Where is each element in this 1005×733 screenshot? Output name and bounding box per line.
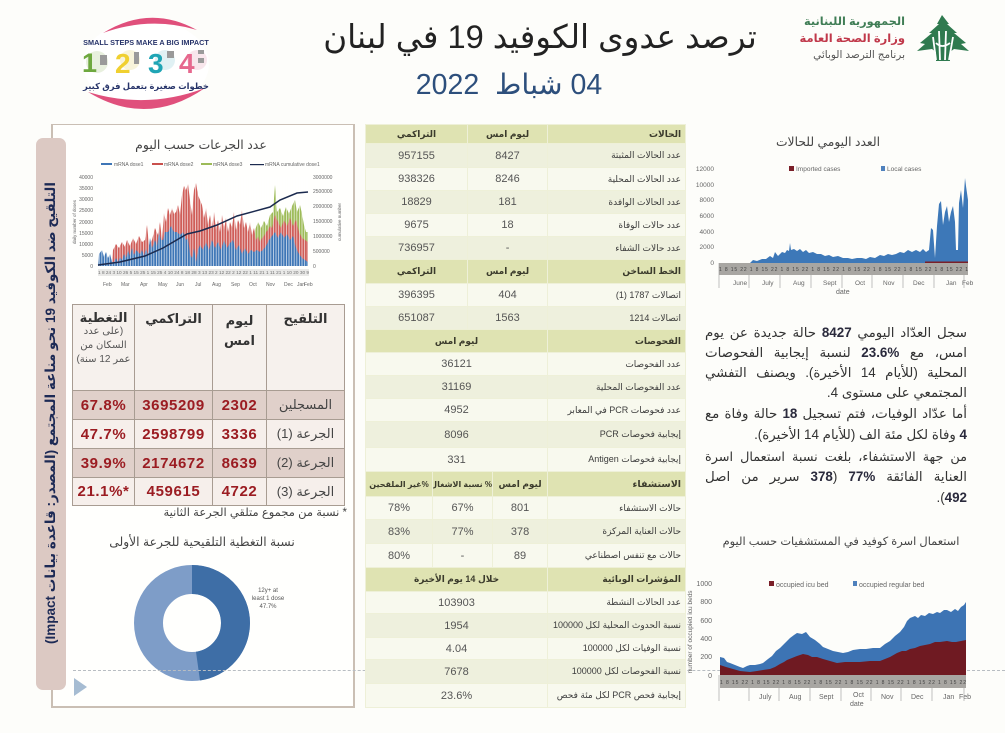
axes labels: 2000000	[313, 204, 333, 210]
table: vaccination: الجرعة (1)	[277, 426, 334, 441]
section: hospitalisation: 83%	[388, 526, 410, 538]
stacked bars	[98, 177, 309, 266]
narrative text block: 4 وفاة لكل مئة الف (للأيام 14 الأخيرة).	[754, 427, 967, 442]
section: cases: 957155	[398, 150, 435, 162]
chart: hospital bed occupancy: 1000	[696, 581, 712, 588]
axes labels: 500000	[313, 249, 330, 255]
table: vaccination: 8639	[222, 454, 257, 472]
chart: daily cases: 4000	[700, 229, 714, 236]
chart: hospital bed occupancy: date	[850, 701, 864, 708]
table: vaccination: 459615	[147, 483, 200, 500]
table: vaccination: 2174672	[142, 454, 205, 472]
section: hospitalisation: 77%	[451, 526, 474, 538]
section: epidemiological indicators: 1954	[444, 620, 469, 632]
section: tests: عدد الفحوصات	[625, 358, 681, 368]
section: cases: -	[506, 242, 509, 254]
axes labels: daily number of doses	[72, 199, 77, 244]
section: cases: عدد حالات الشفاء	[615, 242, 681, 252]
chart: daily cases: June	[733, 280, 747, 287]
table: vaccination: 21.1%*	[78, 483, 129, 500]
section: tests: عدد فحوصات PCR في المعابر	[567, 404, 681, 414]
chart: hospital bed occupancy: 0	[708, 673, 712, 680]
panel: vaccination frame	[51, 124, 355, 708]
legend: mRNA dose2	[164, 162, 194, 168]
table: vaccination: ليوم امس	[224, 313, 255, 348]
section: cases: 938326	[398, 173, 435, 185]
heading: daily doses: عدد الجرعات حسب اليوم	[135, 138, 267, 152]
chart: daily cases: July	[762, 280, 774, 287]
axes labels: 1 8 24 3 10 26 5 15 25 1 15 25 4 10 24 8 18 28 3 13 23 2 12 22 2 12 22 1 11 21 1 11 21 1 10 20 30 9	[98, 270, 309, 275]
axes labels: Jul	[195, 282, 201, 288]
ministry logo text	[799, 16, 905, 61]
section: cases: 18	[501, 219, 514, 231]
date: 04 شباط 2022	[416, 69, 602, 101]
chart: daily cases: Aug	[793, 280, 805, 287]
chart: daily cases: date	[836, 289, 850, 296]
section: hotline: الخط الساخن	[622, 266, 681, 276]
table: vaccination: التلقيح	[284, 311, 327, 326]
section: cases: ليوم امس	[486, 128, 529, 138]
legend: Local cases	[887, 166, 922, 173]
section: cases: 8246	[495, 173, 520, 185]
section: tests: الفحوصات	[635, 336, 681, 346]
axes labels: 1000000	[313, 234, 333, 240]
logo: small steps make a big impact: 4	[179, 48, 195, 79]
section: cases: 18829	[401, 196, 432, 208]
axes labels: 1500000	[313, 219, 333, 225]
section: hospitalisation: 67%	[451, 502, 474, 514]
dashed separator line	[73, 670, 1005, 671]
axes labels: 10000	[79, 242, 93, 248]
section: tests: 4952	[444, 404, 469, 416]
axes labels: Feb	[103, 282, 112, 288]
icon: cedar tree with hand	[917, 15, 969, 61]
chart: hospital bed occupancy: Dec	[911, 694, 924, 701]
legend: occupied regular bed	[859, 582, 924, 589]
legend: mRNA dose1	[114, 162, 144, 168]
narrative text block: سجل العدّاد اليومي 8427 حالة جديدة عن يوم	[705, 325, 967, 340]
donut label	[252, 588, 284, 610]
section: hospitalisation: حالات مع تنفس اصطناعي	[585, 550, 681, 560]
ministry logo text: وزارة الصحة العامة	[799, 32, 905, 44]
donut label: 12y+ at	[258, 588, 278, 594]
section: tests	[366, 330, 685, 471]
section: cases: الحالات	[649, 128, 681, 138]
table: indicators	[365, 124, 686, 708]
section: epidemiological indicators: إيجابية فحص PCR لكل مئة فحص	[557, 690, 681, 700]
chart: hospital bed occupancy: Jan	[943, 694, 954, 701]
axes labels: Oct	[249, 282, 257, 288]
chart: daily cases: Sept	[823, 280, 837, 287]
chart: hospital bed occupancy: Oct	[853, 692, 864, 699]
footnote: * نسبة من مجموع متلقي الجرعة الثانية	[163, 507, 347, 519]
chart: daily cases: 0	[710, 260, 714, 267]
section: cases: عدد الحالات المثبتة	[611, 150, 681, 160]
axes labels: 3000000	[313, 175, 333, 181]
section: tests: ليوم امس	[435, 336, 478, 346]
ministry logo text: الجمهورية اللبنانية	[804, 16, 905, 28]
axes labels: Nov	[266, 282, 275, 288]
section: epidemiological indicators: 4.04	[446, 642, 467, 654]
narrative text block: أما عدّاد الوفيات، فتم تسجيل 18 حالة وفاة مع	[705, 406, 967, 421]
section: hospitalisation: 801	[511, 502, 529, 514]
chart: daily cases: Feb	[962, 280, 974, 287]
legend: occupied icu bed	[776, 582, 829, 589]
heading: coverage donut: نسبة التغطية التلقيحية للجرعة الأولى	[109, 535, 295, 549]
axes labels: Sep	[231, 282, 240, 288]
axes labels: 40000	[79, 175, 93, 181]
axes labels: Aug	[212, 282, 221, 288]
axes labels: Feb	[304, 282, 313, 288]
table: vaccination: الجرعة (2)	[277, 455, 334, 470]
table: vaccination: التغطية	[80, 310, 127, 325]
section: hotline: 404	[498, 289, 517, 301]
chart: daily cases: Oct	[855, 280, 865, 287]
section: hospitalisation: 378	[511, 526, 529, 538]
section: epidemiological indicators: نسبة الوفيات لكل 100000	[583, 643, 681, 653]
section: tests: 8096	[444, 428, 469, 440]
chart: first dose coverage donut	[134, 565, 250, 681]
section: hospitalisation: %غير الملقحين	[369, 480, 429, 488]
section: tests: عدد الفحوصات المحلية	[596, 382, 681, 392]
section: cases: 736957	[398, 242, 435, 254]
axes labels: 20000	[79, 220, 93, 226]
axes labels: Apr	[140, 282, 148, 288]
section: epidemiological indicators: نسبة الحدوث المحلية لكل 100000	[553, 620, 681, 630]
section: cases: 9675	[404, 219, 429, 231]
ICU beds area	[720, 640, 966, 675]
axes labels: 35000	[79, 186, 93, 192]
section: tests: 36121	[441, 358, 472, 370]
donut label: least 1 dose	[252, 596, 284, 602]
legend	[789, 166, 922, 173]
chart: hospital bed occupancy: Aug	[789, 694, 802, 701]
axes labels: Jun	[176, 282, 184, 288]
chart: daily cases: Nov	[883, 280, 895, 287]
axes labels: Mar	[121, 282, 130, 288]
chart: hospital bed occupancy: Feb	[959, 694, 971, 701]
local cases area	[719, 178, 968, 263]
panel: vaccination vertical tab	[36, 138, 66, 690]
narrative text block: امس، مع %23.6 لنسبة إيجابية الفحوصات	[705, 345, 967, 360]
chart: daily cases: Jan	[946, 280, 957, 287]
ministry logo text: برنامج الترصد الوبائي	[813, 49, 905, 61]
chart: daily cases: 8000	[700, 197, 714, 204]
table: vaccination: 47.7%	[81, 426, 126, 442]
axes labels: Dec	[284, 282, 293, 288]
section: hospitalisation: 89	[514, 550, 526, 562]
table: vaccination: 3695209	[142, 396, 205, 414]
section: cases: عدد الحالات المحلية	[608, 174, 681, 184]
heading: hospital beds: استعمال اسرة كوفيد في المستشفيات حسب اليوم	[723, 536, 959, 548]
logo: small steps make a big impact	[82, 18, 209, 109]
section: cases: 8427	[495, 150, 520, 162]
axes labels: 30000	[79, 197, 93, 203]
grey date band	[720, 675, 966, 688]
chart: daily cases: 12000	[696, 166, 714, 173]
chart: daily cases: Dec	[913, 280, 925, 287]
chart: hospital bed occupancy: 600	[700, 618, 712, 625]
chart: daily vaccine doses	[72, 162, 342, 288]
narrative text block	[705, 325, 967, 505]
narrative text block: العناية الفائقة %77 (378 سرير من اصل	[705, 469, 967, 484]
section: hospitalisation: ليوم امس	[498, 478, 542, 488]
section: cases: عدد الحالات الوافدة	[608, 196, 681, 206]
section: hotline: اتصالات 1787 (1)	[616, 290, 681, 300]
chart: daily cases	[696, 166, 974, 296]
section: cases: عدد حالات الوفاة	[618, 220, 681, 230]
section: hotline: التراكمي	[397, 266, 436, 276]
section: epidemiological indicators: نسبة الفحوصات لكل 100000	[572, 666, 681, 676]
axes labels: 0	[313, 264, 316, 270]
chart: hospital bed occupancy: 1 8 15 22 1 8 15 22 1 8 15 22 1 8 15 22 1 8 15 22 1 8 15 22 1 8 15 22 1 8 15 22	[720, 680, 966, 686]
section: epidemiological indicators: المؤشرات الوبائية	[602, 574, 681, 584]
narrative text block: من جهة الاستشفاء، بلغت نسبة استعمال اسرة	[705, 449, 967, 464]
axes labels: cumulative number	[337, 202, 342, 241]
table: vaccination: (على عدد السكان من عمر 12 سنة)	[76, 326, 131, 365]
chart: hospital bed occupancy: number of occupied icu beds	[687, 590, 694, 674]
regular beds area	[720, 602, 966, 675]
chart: hospital bed occupancy	[687, 581, 971, 708]
donut label: 47.7%	[259, 604, 276, 610]
section: hotline: 651087	[398, 312, 435, 324]
table: vaccination: الجرعة (3)	[277, 484, 334, 498]
axes labels: 5000	[82, 253, 93, 259]
cumulative line	[98, 192, 308, 265]
axes labels: May	[158, 282, 168, 288]
section: hotline	[366, 260, 685, 329]
legend	[769, 581, 924, 589]
chart: daily cases: 2000	[700, 244, 714, 251]
section: tests: إيجابية فحوصات Antigen	[588, 454, 681, 464]
section: epidemiological indicators: 7678	[444, 666, 469, 678]
table: vaccination: 3336	[222, 426, 257, 442]
axes labels: 15000	[79, 231, 93, 237]
chart: hospital bed occupancy: Sept	[819, 694, 833, 701]
table: vaccination: المسجلين	[279, 397, 332, 412]
chart: hospital bed occupancy: July	[759, 694, 772, 701]
logo: small steps make a big impact: 3	[148, 48, 164, 79]
section: hotline: 396395	[398, 289, 435, 301]
section: hospitalisation: 78%	[388, 502, 410, 514]
title: ترصد عدوى الكوفيد 19 في لبنان	[323, 18, 757, 55]
section: hotline: اتصالات 1214	[629, 312, 681, 322]
legend: Imported cases	[796, 166, 841, 173]
chart: hospital bed occupancy: Nov	[881, 694, 894, 701]
heading: daily cases: العدد اليومي للحالات	[776, 135, 880, 149]
table: vaccination: 2302	[222, 396, 257, 414]
section: epidemiological indicators: 23.6%	[441, 690, 472, 702]
section: hospitalisation: الاستشفاء	[633, 478, 681, 490]
table: vaccination	[72, 304, 345, 506]
section: cases: 181	[498, 196, 517, 208]
table: vaccination: 2598799	[142, 426, 205, 442]
grey date band	[719, 263, 968, 275]
table: vaccination: 4722	[222, 483, 257, 500]
table: vaccination: 39.9%	[81, 454, 126, 472]
section: tests: إيجابية فحوصات PCR	[600, 429, 681, 439]
axes labels: 25000	[79, 208, 93, 214]
axes labels: 0	[90, 264, 93, 270]
section: hotline: ليوم امس	[486, 266, 529, 276]
logo: small steps make a big impact: 2	[115, 48, 131, 79]
section: hospitalisation	[366, 472, 685, 567]
logo: small steps make a big impact: SMALL STEPS MAKE A BIG IMPACT	[83, 38, 209, 47]
chart: hospital bed occupancy: 200	[700, 654, 712, 661]
chart: daily cases: 10000	[696, 182, 714, 189]
section: hotline: 1563	[495, 312, 520, 324]
table: vaccination: التراكمي	[145, 311, 202, 326]
legend: mRNA cumulative dose1	[265, 162, 320, 168]
vertical heading: التلقيح ضد الكوفيد 19 نحو مناعة المجتمع (المصدر: قاعدة بيانات Impact)	[43, 182, 58, 644]
icon: triangle marker	[74, 678, 87, 696]
section: hospitalisation: حالات الاستشفاء	[619, 502, 681, 512]
section: epidemiological indicators: 103903	[438, 596, 475, 608]
narrative text block: 492).	[936, 490, 967, 505]
axes labels: 2500000	[313, 189, 333, 195]
logo: small steps make a big impact: خطوات صغيرة بتعمل فرق كبير	[82, 81, 209, 92]
axes labels	[72, 175, 342, 288]
section: cases: التراكمي	[397, 128, 436, 138]
section: tests: 31169	[442, 381, 471, 393]
chart: hospital bed occupancy: 800	[700, 599, 712, 606]
section: hospitalisation: -	[461, 550, 464, 562]
section: tests: 331	[447, 454, 466, 466]
narrative text block: المحلية (للأيام 14 الأخيرة). ويصنف التفشي	[705, 365, 967, 380]
section: cases	[366, 125, 685, 259]
narrative text block: المجتمعي على مستوى 4.	[827, 385, 967, 400]
section: hospitalisation: 80%	[388, 550, 410, 562]
section: epidemiological indicators: خلال 14 يوم الأخيرة	[414, 574, 499, 584]
legend	[101, 162, 320, 168]
chart: daily cases: 1 8 15 22 1 8 15 22 1 8 15 22 1 8 15 22 1 8 15 22 1 8 15 22 1 8 15 22 1 8 15 22 1	[719, 267, 968, 273]
section: epidemiological indicators	[366, 568, 685, 707]
section: hospitalisation: حالات العناية المركزة	[602, 526, 681, 536]
table: vaccination: 67.8%	[81, 396, 126, 414]
chart: daily cases: 6000	[700, 213, 714, 220]
section: epidemiological indicators: عدد الحالات النشطة	[606, 597, 681, 607]
legend: mRNA dose3	[213, 162, 243, 168]
axes labels: Jan	[297, 282, 305, 288]
chart: hospital bed occupancy: 400	[700, 636, 712, 643]
logo: small steps make a big impact: 1	[82, 48, 97, 78]
